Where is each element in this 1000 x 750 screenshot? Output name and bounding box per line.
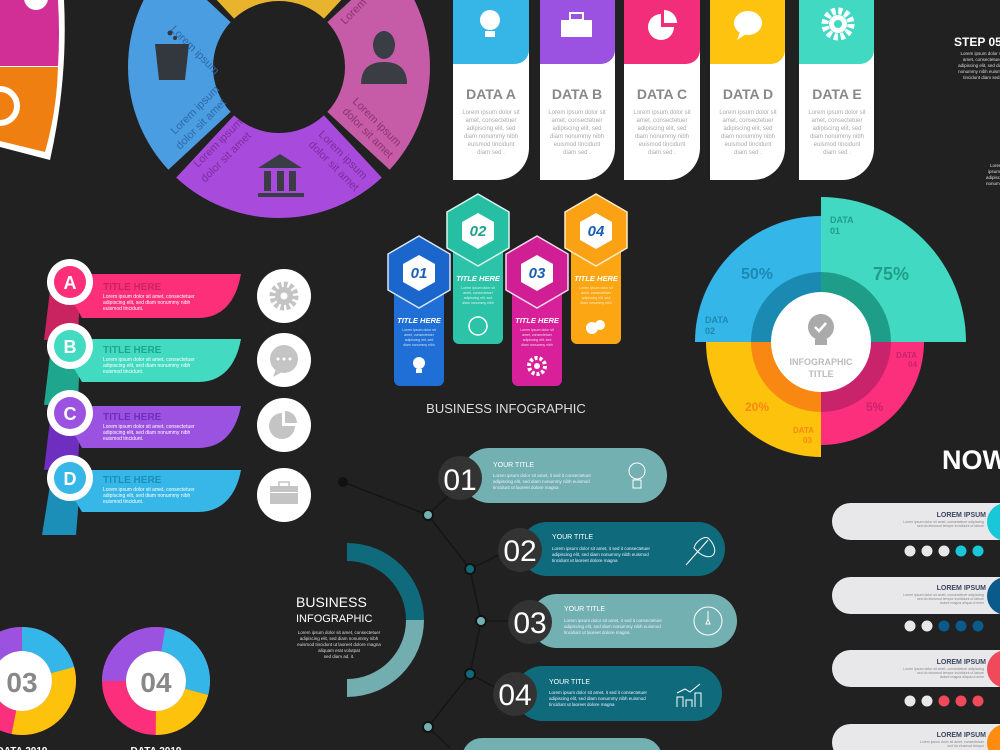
card: DATA B: adipiscing elit, sed — [552, 126, 602, 132]
ribbon B: B — [64, 337, 76, 357]
ribbon C: euismod tincidunt. — [103, 436, 143, 442]
pill 02: YOUR TITLE — [552, 534, 593, 541]
card: DATA C: euismod tincidunt — [639, 142, 686, 148]
card: DATA E: euismod tincidunt — [814, 142, 861, 148]
item 4 — [832, 724, 1000, 750]
icon: bank — [258, 154, 304, 197]
pill 04: 04 — [498, 679, 532, 712]
card: DATA E — [799, 0, 874, 180]
card: DATA E: amet, consectetuer — [811, 118, 863, 124]
pill 02: 02 — [503, 535, 537, 568]
item 2: sed do eiusmod tempor incididunt ut labore — [917, 597, 984, 601]
card: DATA D: diam nonummy nibh — [721, 134, 775, 140]
card: DATA B: amet, consectetuer — [551, 118, 603, 124]
panel: progress list — [832, 503, 1000, 750]
item 1 — [832, 503, 1000, 556]
card: DATA A: adipiscing elit, sed — [466, 126, 516, 132]
chart: ring segments: Lorem ipsum — [350, 96, 403, 149]
ribbon D: TITLE HERE — [103, 475, 162, 486]
dots: timeline nodes — [338, 477, 486, 732]
item 4: Lorem ipsum dolor sit amet, consectetuer — [920, 740, 985, 744]
step 03: adipiscing elit, sed — [523, 338, 551, 342]
chart: half-ring business infographic: INFOGRAPHIC — [296, 613, 372, 625]
pill 04: Lorem ipsum dolor sit amet, it sed it consectetuer — [549, 690, 648, 695]
step 02: TITLE HERE — [456, 274, 501, 283]
chart: ring segments: dolor sit amet — [174, 97, 229, 152]
item 3: Lorem ipsum dolor sit amet, consectetuer adipiscing — [903, 667, 984, 671]
item 3: sed do eiusmod tempor incididunt ut labore — [917, 671, 984, 675]
item 3: LOREM IPSUM — [937, 659, 986, 666]
step 03 — [506, 236, 568, 386]
chart: quadrant donut: DATA — [705, 315, 729, 325]
step 04: TITLE HERE — [574, 274, 619, 283]
card: DATA B: euismod tincidunt — [554, 142, 601, 148]
step 02: diam nonummy nibh — [462, 301, 494, 305]
chart: half-ring business infographic: aliquam erat volutpat — [318, 648, 361, 653]
item 4: LOREM IPSUM — [937, 732, 986, 739]
chart: half-ring business infographic: euismod tincidunt ut laoreet dolore magna — [297, 642, 381, 647]
card: DATA E: diam sed . — [823, 150, 851, 156]
pill 01: adipiscing elit, sed diam nonummy nibh euismod — [493, 479, 590, 484]
ribbon D: euismod tincidunt. — [103, 499, 143, 505]
card: DATA C: amet, consectetuer — [636, 118, 688, 124]
text block: step 05: amet, consectetuer — [963, 57, 1000, 62]
item 4: sed do eiusmod tempor — [947, 744, 985, 748]
step 04: Lorem ipsum dolor sit — [579, 286, 613, 290]
item 2 — [832, 577, 1000, 632]
card: DATA E: DATA E — [812, 86, 862, 102]
card: DATA C: diam nonummy nibh — [635, 134, 689, 140]
pill 02: tincidunt ut laoreet dolore magna — [552, 558, 618, 563]
ribbon C — [44, 390, 241, 470]
chart: donut 04: 04 — [140, 667, 172, 698]
chart: half-ring business infographic: sed diam ad. it. — [324, 654, 354, 659]
pill 05 — [462, 738, 662, 750]
pill 01: YOUR TITLE — [493, 462, 534, 469]
chart: ring segments: Lorem ipsum — [316, 129, 369, 182]
step 03: amet, consectetuer — [522, 333, 553, 337]
card: DATA B: diam sed . — [563, 150, 591, 156]
card: DATA A: Lorem ipsum dolor sit — [462, 110, 520, 116]
ribbon D: Lorem ipsum dolor sit amet, consectetuer — [103, 487, 195, 493]
pill 04: tincidunt ut laoreet dolore magna — [549, 702, 615, 707]
chart: quadrant donut — [695, 197, 966, 457]
chart: quadrant donut: INFOGRAPHIC — [790, 357, 853, 367]
chart: ring segments: dolor sit amet — [306, 139, 361, 194]
step 03: 03 — [529, 265, 546, 282]
ribbon C: Lorem ipsum dolor sit amet, consectetuer — [103, 424, 195, 430]
pill 02: Lorem ipsum dolor sit amet, it sed it consectetuer — [552, 546, 651, 551]
panel: top-left sector — [0, 0, 65, 160]
pill 01: 01 — [443, 464, 477, 497]
card: DATA B: Lorem ipsum dolor sit — [548, 110, 606, 116]
card: DATA C: DATA C — [637, 86, 687, 102]
step 04: adipiscing elit, sed — [582, 296, 610, 300]
step 04: diam nonummy nibh — [580, 301, 612, 305]
chart: half-ring business infographic: BUSINESS — [296, 594, 367, 610]
step 04 — [565, 194, 627, 344]
chart: quadrant donut: 5% — [866, 400, 884, 414]
icons: white circle icons — [257, 269, 311, 522]
step 02: adipiscing elit, sed — [464, 296, 492, 300]
item 3 — [832, 650, 1000, 706]
step 02: amet, consectetuer — [463, 291, 494, 295]
pill 03: YOUR TITLE — [564, 606, 605, 613]
card: DATA C: diam sed . — [648, 150, 676, 156]
card: DATA E: adipiscing elit, sed — [812, 126, 862, 132]
step 01: 01 — [411, 265, 427, 282]
item 2: Lorem ipsum dolor sit amet, consectetuer adipiscing — [903, 593, 984, 597]
card: DATA D: euismod tincidunt — [725, 142, 772, 148]
step 02: Lorem ipsum dolor sit — [461, 286, 495, 290]
step 01: diam nonummy nibh — [403, 343, 435, 347]
pill 01: tincidunt ut laoreet dolore magna — [493, 485, 559, 490]
ribbon C: TITLE HERE — [103, 412, 162, 423]
card: DATA E: diam nonummy nibh — [810, 134, 864, 140]
ribbon D — [42, 455, 241, 535]
pill 04: adipiscing elit, sed diam nonummy nibh euismod — [549, 696, 646, 701]
step 04: amet, consectetuer — [581, 291, 612, 295]
chart: donut 03 — [0, 627, 76, 735]
text block: step 05: adipisc — [986, 175, 1000, 180]
chart: quadrant donut: 03 — [803, 436, 812, 445]
card: DATA D: diam sed . — [734, 150, 762, 156]
step 01: adipiscing elit, sed — [405, 338, 433, 342]
item 2: dolore magna aliqua ut enim — [940, 601, 984, 605]
ribbon A — [44, 259, 241, 340]
step 01: amet, consectetuer — [404, 333, 435, 337]
card: DATA A: DATA A — [466, 86, 516, 102]
chart: quadrant donut: 20% — [745, 400, 769, 414]
chart: quadrant donut: 04 — [908, 360, 917, 369]
ribbon B — [44, 323, 241, 405]
card: DATA D: Lorem ipsum dolor sit — [719, 110, 777, 116]
pill 01 — [438, 448, 667, 503]
chart: quadrant donut: 01 — [830, 226, 840, 236]
item 1: Lorem ipsum dolor sit amet, consectetuer adipiscing — [903, 520, 984, 524]
ribbon B: euismod tincidunt. — [103, 369, 143, 375]
step 04: 04 — [588, 223, 605, 240]
step 03: diam nonummy nibh — [521, 343, 553, 347]
panel: ribbon list A-D — [42, 259, 241, 535]
ribbon A: adipiscing elit, sed diam nonummy nibh — [103, 300, 190, 306]
text block: step 05 — [954, 35, 1000, 186]
card: DATA B: diam nonummy nibh — [550, 134, 604, 140]
card: DATA C: adipiscing elit, sed — [637, 126, 687, 132]
ribbon D: adipiscing elit, sed diam nonummy nibh — [103, 493, 190, 499]
pill 02 — [498, 522, 725, 576]
chart: quadrant donut: DATA — [896, 351, 917, 360]
ribbon C: C — [64, 404, 76, 424]
chart: quadrant donut: DATA — [830, 215, 854, 225]
card: DATA C — [624, 0, 700, 180]
chart: ring segments: dolor sit amet — [340, 106, 395, 161]
step 03: Lorem ipsum dolor sit — [520, 328, 554, 332]
pill 03: adipiscing elit, sed diam nonummy nibh euismod — [564, 624, 661, 629]
card: DATA D: adipiscing elit, sed — [723, 126, 773, 132]
ribbon D: D — [64, 469, 76, 489]
chart: half-ring business infographic — [296, 543, 424, 697]
ribbon B: Lorem ipsum dolor sit amet, consectetuer — [103, 357, 195, 363]
ribbon A: Lorem ipsum dolor sit amet, consectetuer — [103, 294, 195, 300]
chart: half-ring business infographic: Lorem ipsum dolor sit amet, consectetuer — [298, 630, 381, 635]
step 02: 02 — [470, 223, 487, 240]
chart: quadrant donut: DATA — [793, 426, 814, 435]
card: DATA D — [710, 0, 785, 180]
card: DATA D: DATA D — [723, 86, 773, 102]
item 1: sed do eiusmod tempor incididunt ut labore — [917, 524, 984, 528]
chart: quadrant donut: 50% — [741, 266, 773, 283]
ribbon B: adipiscing elit, sed diam nonummy nibh — [103, 363, 190, 369]
text block: step 05: tincidunt diam sed. — [963, 75, 1000, 80]
step 02 — [447, 194, 509, 344]
ribbon C: adipiscing elit, sed diam nonummy nibh — [103, 430, 190, 436]
chart: quadrant donut: 02 — [705, 326, 715, 336]
panel: data cards A-E — [453, 0, 874, 180]
pill 03: tincidunt ut laoreet dolore magna — [564, 630, 630, 635]
ribbon A: euismod tincidunt. — [103, 306, 143, 312]
chart: ring segments: Lorem ipsum — [169, 84, 222, 137]
card: DATA C: Lorem ipsum dolor sit — [633, 110, 691, 116]
icon: person — [361, 31, 407, 84]
chart: ring segments: Lorem ipsum — [192, 117, 245, 170]
chart: ring segments — [126, 0, 432, 220]
chart: donut 03: 03 — [6, 667, 38, 698]
chart: quadrant donut: TITLE — [808, 369, 834, 379]
chart: half-ring business infographic: adipiscing elit, sed diam nonummy nibh — [300, 636, 379, 641]
ribbon A: A — [64, 273, 76, 293]
chart: donut 04 — [105, 630, 207, 732]
card: DATA A: diam nonummy nibh — [464, 134, 518, 140]
step 01: TITLE HERE — [397, 316, 442, 325]
card: DATA B: DATA B — [552, 86, 602, 102]
card: DATA A: diam sed . — [477, 150, 505, 156]
pill 04 — [493, 666, 722, 721]
pill 03: Lorem ipsum dolor sit amet, it sed it consectetuer — [564, 618, 663, 623]
panel: hexagon step cards — [388, 194, 627, 386]
item 2: LOREM IPSUM — [937, 585, 986, 592]
pill 02: adipiscing elit, sed diam nonummy nibh euismod — [552, 552, 649, 557]
item 3: dolore magna aliqua ut enim — [940, 675, 984, 679]
text block: step 05: nonum — [986, 181, 1000, 186]
card: DATA D: amet, consectetuer — [722, 118, 774, 124]
chart: ring segments: Lorem ipsum — [168, 24, 221, 77]
step 01: Lorem ipsum dolor sit — [402, 328, 436, 332]
pill 03 — [508, 594, 737, 648]
card: DATA A: euismod tincidunt — [468, 142, 515, 148]
card: DATA A: amet, consectetuer — [465, 118, 517, 124]
step 03: TITLE HERE — [515, 316, 560, 325]
ribbon A: TITLE HERE — [103, 282, 162, 293]
icon: trash bin — [155, 30, 189, 80]
pill 03: 03 — [513, 607, 547, 640]
card: DATA B — [540, 0, 615, 180]
heading: business infographic (center): BUSINESS INFOGRAPHIC — [426, 401, 586, 416]
pill 04: YOUR TITLE — [549, 679, 590, 686]
diagram: timeline connectors — [343, 482, 510, 748]
chart: quadrant donut: 75% — [873, 264, 909, 284]
text block: step 05: ipsum — [988, 169, 1000, 174]
text: donut labels — [0, 746, 182, 750]
chart: ring segments: dolor sit amet — [199, 130, 254, 185]
card: DATA A — [453, 0, 529, 180]
step 01 — [388, 236, 450, 386]
card: DATA E: Lorem ipsum dolor sit — [808, 110, 866, 116]
pill 01: Lorem ipsum dolor sit amet, it sed it consectetuer — [493, 473, 592, 478]
panel: timeline pills — [438, 448, 737, 750]
ribbon B: TITLE HERE — [103, 345, 162, 356]
item 1: LOREM IPSUM — [937, 512, 986, 519]
